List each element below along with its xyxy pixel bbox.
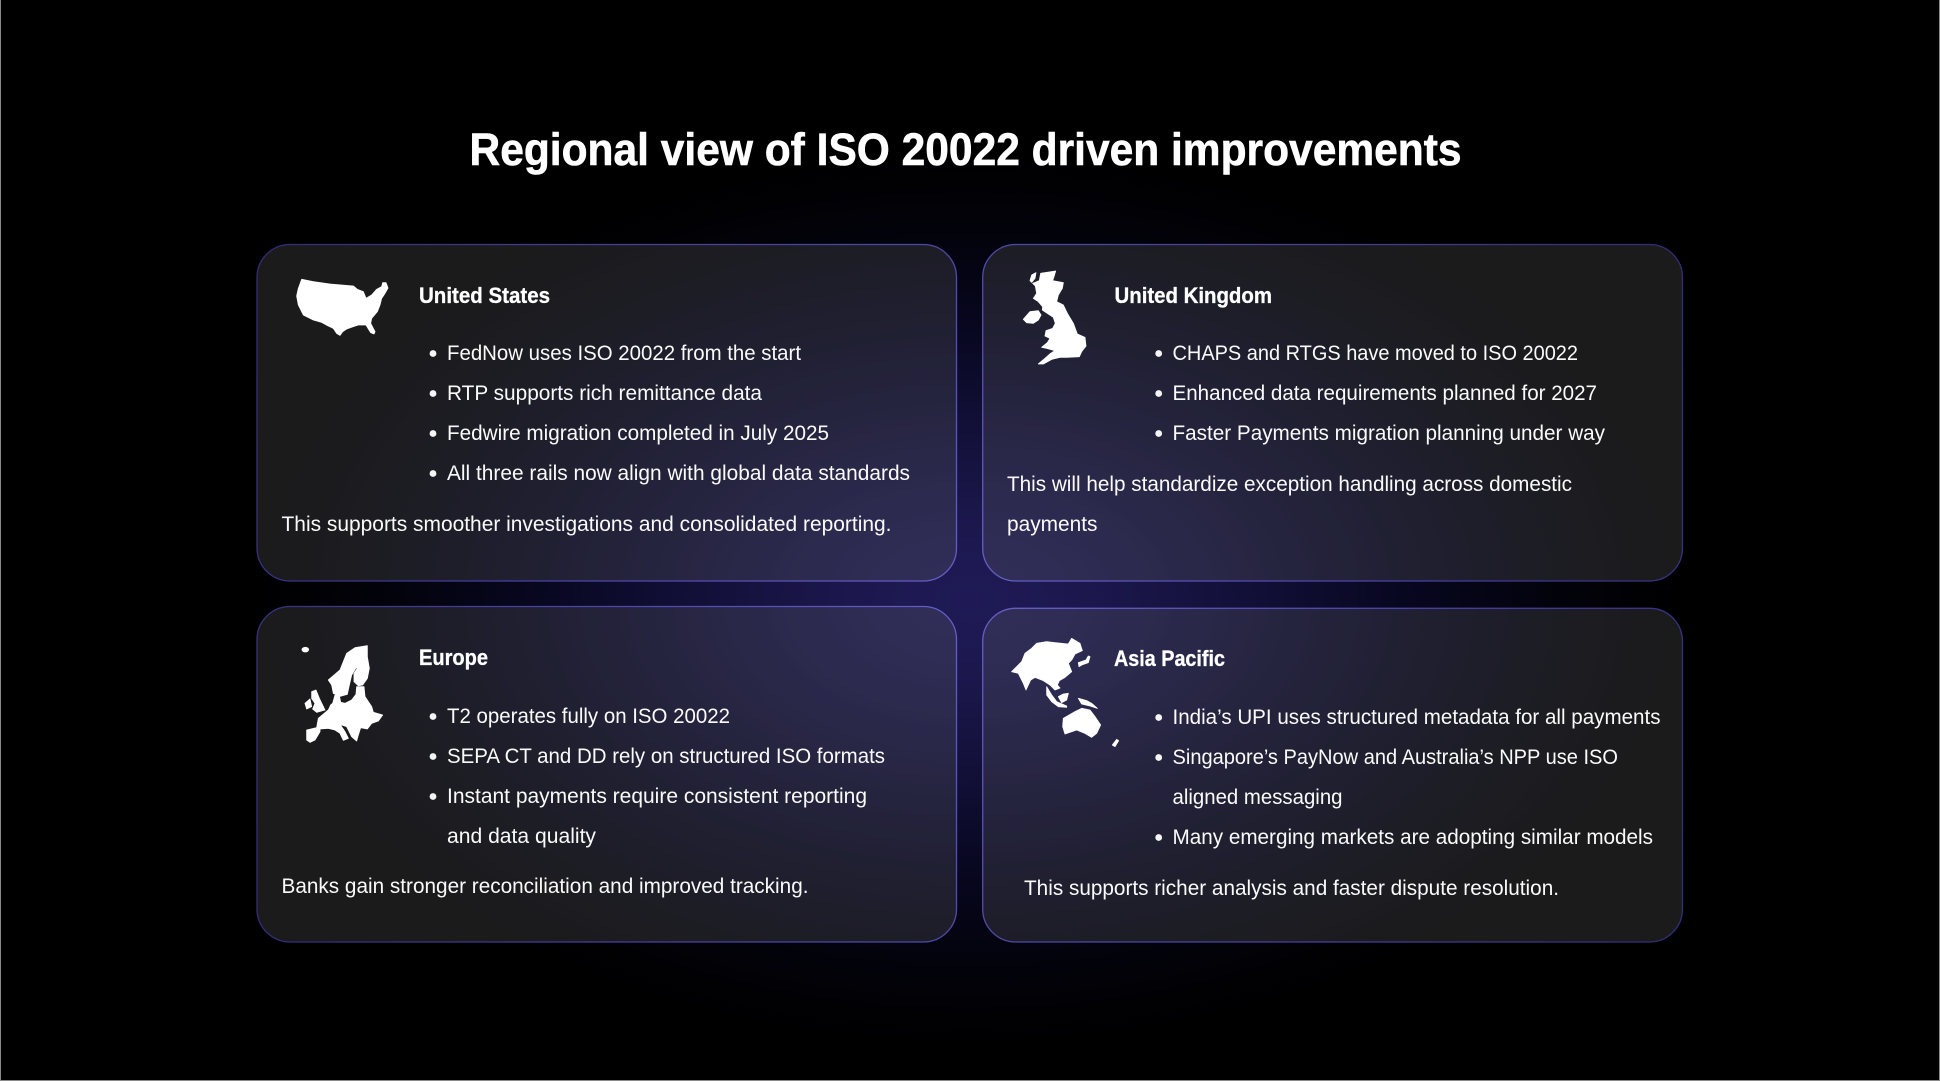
panel: Asia Pacific <box>983 608 1682 942</box>
bullet list: Fedwire migration completed in July 2025 <box>447 422 829 445</box>
icon: USA map <box>297 279 388 335</box>
card background <box>983 244 1682 581</box>
bullet list: India’s UPI uses structured metadata for all payments <box>1172 706 1660 729</box>
summary text: Banks gain stronger reconciliation and improved tracking. <box>282 875 808 898</box>
heading: Asia Pacific <box>1114 646 1225 671</box>
card background <box>257 244 956 581</box>
panel: United States <box>257 244 956 581</box>
bullet list: CHAPS and RTGS have moved to ISO 20022 <box>1172 342 1578 365</box>
summary text: This supports richer analysis and faster dispute resolution. <box>1024 877 1559 900</box>
bullet list: Enhanced data requirements planned for 2027 <box>1172 382 1597 405</box>
bullet list: Instant payments require consistent reporting <box>447 785 867 808</box>
title: Regional view of ISO 20022 driven improvements <box>470 124 1462 175</box>
bullet list: Faster Payments migration planning under way <box>1172 422 1605 445</box>
icon: Europe map <box>302 646 383 742</box>
bullet list <box>430 705 885 848</box>
bullet list: and data quality <box>447 825 596 848</box>
summary text <box>1007 473 1572 536</box>
card background <box>983 608 1682 942</box>
icon: UK map <box>1023 271 1086 364</box>
bullet list: RTP supports rich remittance data <box>447 382 762 405</box>
heading: Europe <box>419 645 488 670</box>
bullet list <box>430 342 910 485</box>
bullet list: T2 operates fully on ISO 20022 <box>447 705 730 728</box>
bullet list: SEPA CT and DD rely on structured ISO formats <box>447 745 885 768</box>
summary text: This supports smoother investigations and consolidated reporting. <box>282 513 892 536</box>
heading: United Kingdom <box>1114 283 1272 308</box>
icon: Asia Pacific map <box>1012 638 1119 747</box>
bullet list: FedNow uses ISO 20022 from the start <box>447 342 801 365</box>
card background <box>257 606 956 942</box>
heading: United States <box>419 283 550 308</box>
bullet list: All three rails now align with global data standards <box>447 462 910 485</box>
bullet list: Many emerging markets are adopting similar models <box>1172 826 1653 849</box>
summary text: This will help standardize exception handling across domestic <box>1007 473 1572 496</box>
summary text: payments <box>1007 513 1098 536</box>
bullet list: Singapore’s PayNow and Australia’s NPP use ISO <box>1172 746 1618 769</box>
bullet list <box>1155 706 1660 849</box>
bullet list: aligned messaging <box>1172 786 1342 809</box>
panel: Europe <box>257 606 956 942</box>
panel: United Kingdom <box>983 244 1682 581</box>
bullet list <box>1155 342 1605 445</box>
